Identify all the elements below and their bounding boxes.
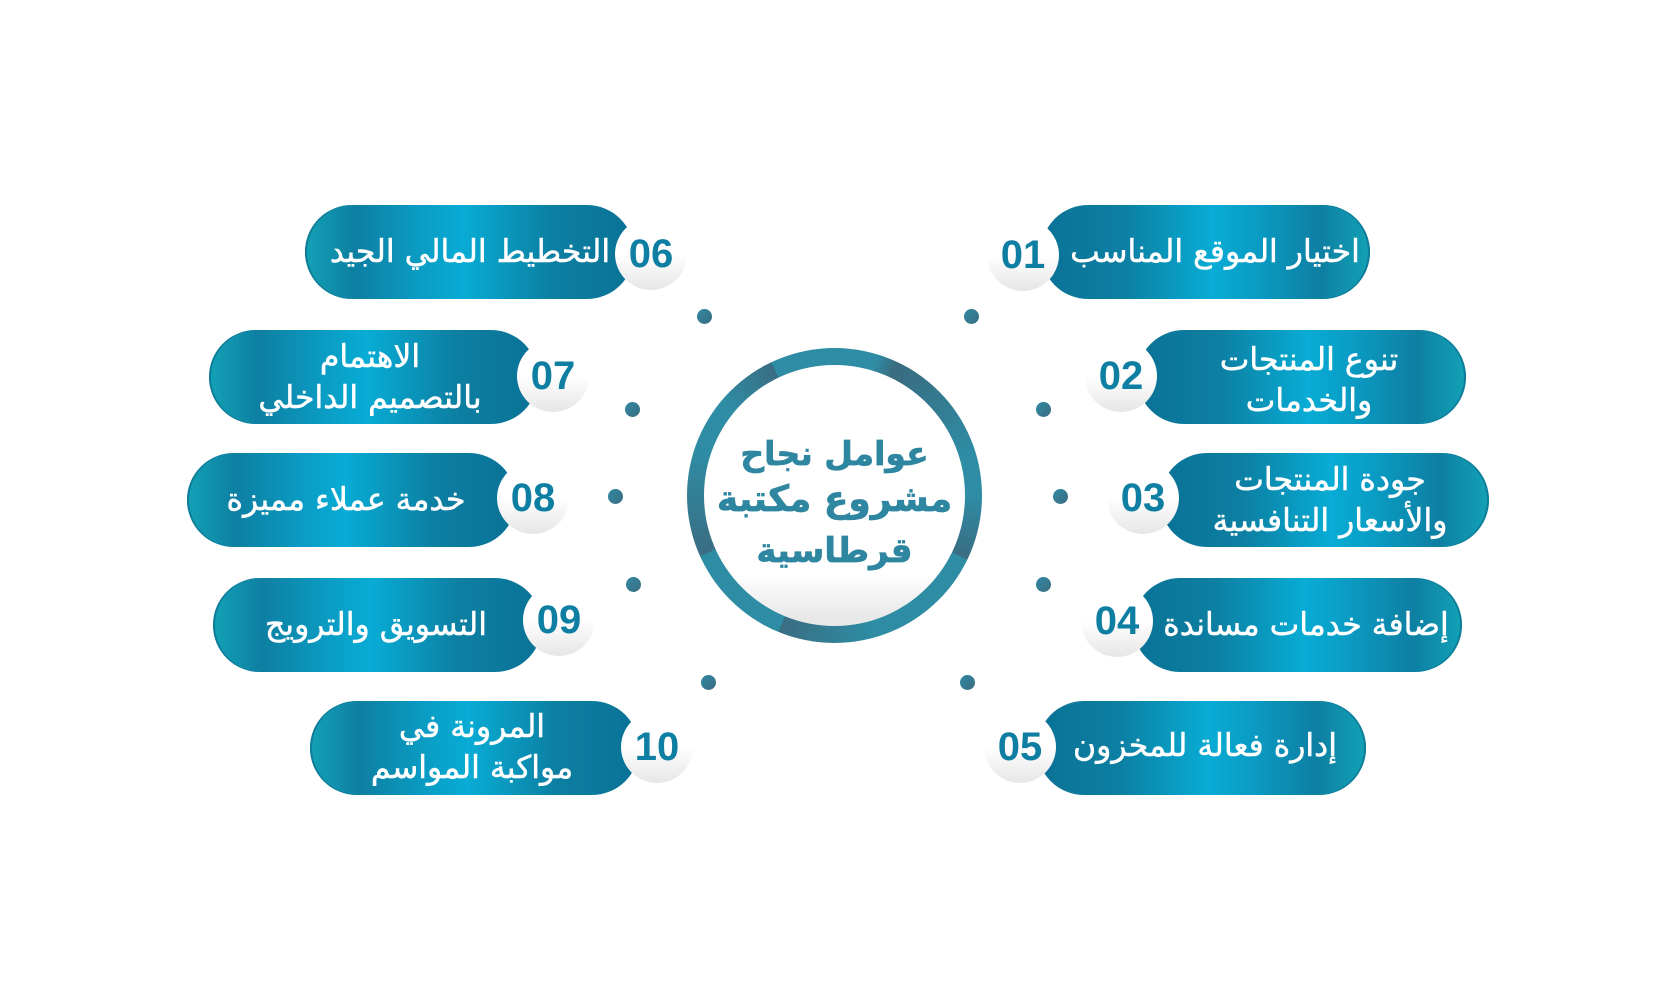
label 06: التخطيط المالي الجيد [330,234,610,270]
number 07 [517,340,589,412]
number 02: 02 [1099,354,1143,398]
number 08 [497,462,569,534]
item 09: marketing [213,578,592,672]
label 04: إضافة خدمات مساندة [1163,607,1449,643]
inner disc [704,365,965,626]
number 09 [523,584,595,656]
item 01: choosing the right location [990,205,1370,299]
number 10 [621,711,693,783]
title: مشروع مكتبة [717,478,952,520]
number 05 [984,711,1056,783]
number 05: 05 [998,725,1042,769]
title [717,434,952,571]
number 04 [1081,585,1153,657]
number 01: 01 [1001,233,1045,277]
number 04: 04 [1095,599,1139,643]
pill 10 [310,701,639,795]
pill 04 [1133,578,1462,672]
item 04: supporting services [1084,578,1462,672]
label 03 [1213,462,1447,540]
title: قرطاسية [756,531,913,571]
pill 07 [209,330,538,424]
label 08: خدمة عملاء مميزة [227,482,465,518]
number 07: 07 [531,354,575,398]
number 03: 03 [1121,476,1165,520]
label 03: والأسعار التنافسية [1213,503,1447,539]
label 02: تنوع المنتجات [1220,342,1398,378]
label 07: بالتصميم الداخلي [258,380,482,416]
number 08: 08 [511,476,555,520]
label 10 [371,709,573,786]
label 09: التسويق والترويج [265,607,487,643]
label 01: اختيار الموقع المناسب [1070,234,1360,270]
number 02 [1085,340,1157,412]
label 03: جودة المنتجات [1234,462,1426,498]
label 10: المرونة في [399,709,545,745]
item 10: seasonal flexibility [310,701,690,795]
pill 03 [1160,453,1489,547]
number 01 [987,219,1059,291]
item 06: financial planning [305,205,684,299]
item 05: inventory management [986,701,1366,795]
central ring with title [687,348,982,643]
pill 01 [1041,205,1370,299]
number 09: 09 [537,598,581,642]
item 08: customer service [187,453,566,547]
item 03: quality and competitive prices [1110,453,1489,547]
label 05: إدارة فعالة للمخزون [1073,728,1337,764]
label 02: والخدمات [1246,383,1372,419]
label 10: مواكبة المواسم [371,750,573,786]
pill 02 [1137,330,1466,424]
label 07 [258,339,482,416]
number 10: 10 [635,725,679,769]
pill 09 [213,578,542,672]
label 02 [1220,342,1398,420]
item 07: interior design [209,330,586,424]
number 06: 06 [629,232,673,276]
number 03 [1107,462,1179,534]
number 06 [615,218,687,290]
label 07: الاهتمام [320,339,420,375]
title: عوامل نجاح [740,434,929,473]
pill 06 [305,205,634,299]
pill 08 [187,453,516,547]
pill 05 [1037,701,1366,795]
item 02: product and service variety [1088,330,1466,424]
